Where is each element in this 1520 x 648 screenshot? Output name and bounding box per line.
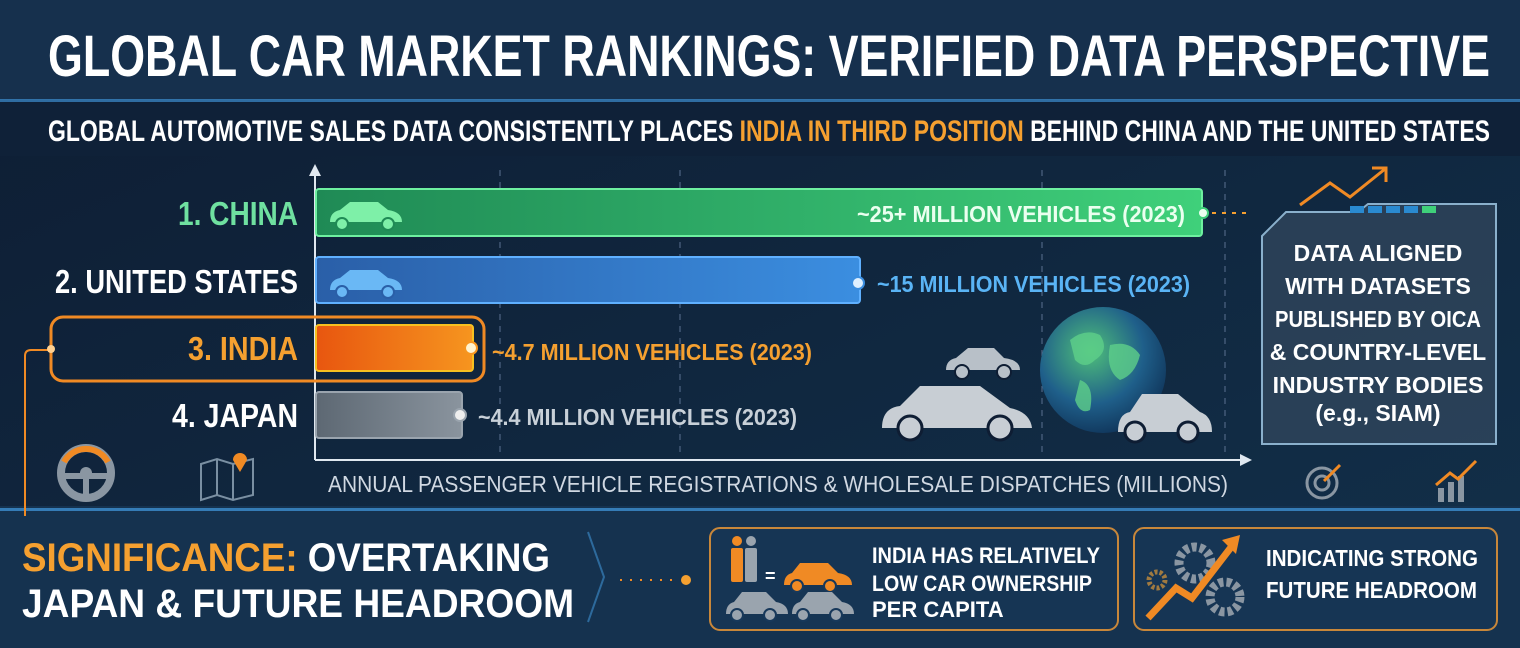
panel: data source: PUBLISHED BY OICA <box>1275 306 1481 332</box>
arrow: connector <box>588 532 691 622</box>
panel: car ownership: PER CAPITA <box>872 597 1004 622</box>
label: india: 3. INDIA <box>188 330 298 367</box>
value: us: ~15 MILLION VEHICLES (2023) <box>877 271 1190 297</box>
panel: future headroom: INDICATING STRONG <box>1266 545 1478 571</box>
panel: car ownership: LOW CAR OWNERSHIP <box>872 571 1092 596</box>
heading: significance <box>22 536 574 626</box>
bar: india <box>316 325 473 371</box>
panel: data source: DATA ALIGNED <box>1294 240 1462 266</box>
panel: car ownership <box>710 528 1118 630</box>
bar: japan <box>316 392 462 438</box>
value: japan: ~4.4 MILLION VEHICLES (2023) <box>478 404 797 430</box>
icon: map pin <box>201 453 253 500</box>
icon: people equals cars <box>726 536 854 621</box>
icon: blue car <box>330 270 402 298</box>
icon: target <box>1307 465 1340 498</box>
label: japan: 4. JAPAN <box>172 397 298 434</box>
panel: data source <box>1262 204 1496 444</box>
panel: data source: INDUSTRY BODIES <box>1273 372 1483 398</box>
label: china: 1. CHINA <box>178 195 298 232</box>
bar chart <box>25 164 1252 516</box>
heading: significance: SIGNIFICANCE: OVERTAKING <box>22 536 550 580</box>
value: china: ~25+ MILLION VEHICLES (2023) <box>857 201 1185 227</box>
icon: bar chart trend <box>1436 461 1476 502</box>
panel: data source: & COUNTRY-LEVEL <box>1270 339 1486 365</box>
label: us: 2. UNITED STATES <box>55 263 298 300</box>
panel: data source: (e.g., SIAM) <box>1315 400 1441 426</box>
panel: data source: WITH DATASETS <box>1285 273 1471 299</box>
icon: trend arrow <box>1300 168 1386 205</box>
icon: gears with arrow <box>1148 535 1240 618</box>
icon: steering wheel <box>61 448 111 498</box>
bar: china <box>316 189 1202 236</box>
heading: significance: JAPAN & FUTURE HEADROOM <box>22 582 574 626</box>
illustration: cars and globe <box>882 307 1212 442</box>
panel: car ownership: INDIA HAS RELATIVELY <box>872 543 1100 568</box>
panel: future headroom: FUTURE HEADROOM <box>1266 577 1477 603</box>
icon: people equals cars: = <box>765 566 776 586</box>
bar: us <box>316 257 860 303</box>
india highlight <box>25 317 484 516</box>
icon: green car <box>330 202 402 230</box>
value: india: ~4.7 MILLION VEHICLES (2023) <box>492 339 812 365</box>
axis label: ANNUAL PASSENGER VEHICLE REGISTRATIONS & WHOLESALE DISPATCHES (MILLIONS) <box>328 471 1228 497</box>
panel: future headroom <box>1134 528 1497 630</box>
